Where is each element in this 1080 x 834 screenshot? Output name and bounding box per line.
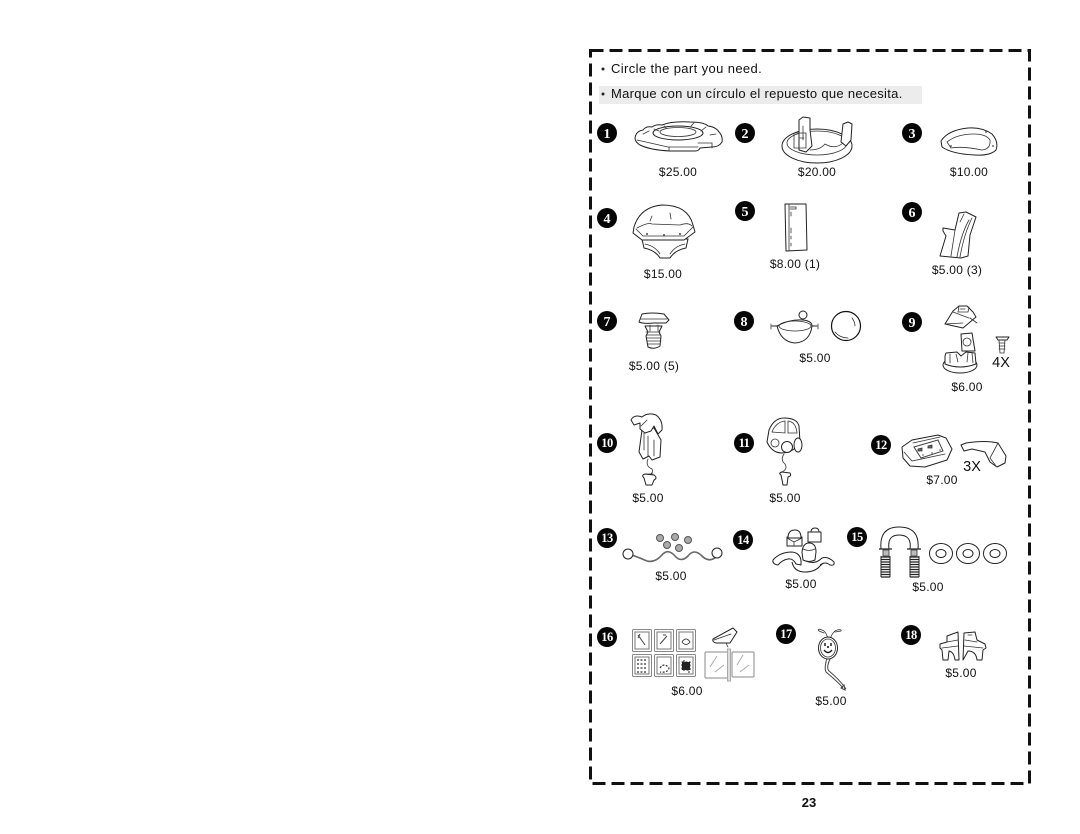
part 18 (901, 625, 986, 680)
part 2: 2 (742, 127, 748, 142)
part 11: $5.00 (769, 491, 801, 505)
page number: 23 (802, 795, 816, 810)
part 16: $6.00 (671, 684, 703, 698)
part 17: 17 (780, 627, 792, 641)
part 10: 10 (601, 436, 613, 450)
part 1 (597, 122, 722, 179)
part 4 (597, 205, 695, 281)
part 14: $5.00 (785, 577, 817, 591)
part 14: 14 (737, 533, 750, 547)
part 7 (597, 311, 679, 373)
instruction: Spanish highlighted: Marque con un círculo el repuesto que necesita. (611, 86, 903, 101)
part 12: 3X (963, 459, 981, 475)
part 13: $5.00 (655, 569, 687, 583)
part 7: 7 (604, 315, 610, 330)
part 18: $5.00 (945, 666, 977, 680)
part 10 (597, 414, 664, 505)
part 9: 9 (908, 316, 916, 331)
part 15: $5.00 (912, 580, 944, 594)
part 6: 6 (908, 206, 916, 221)
part 15 (847, 527, 1006, 594)
part 1: $25.00 (659, 165, 697, 179)
part 6: $5.00 (3) (932, 263, 982, 277)
part 7: $5.00 (5) (629, 359, 679, 373)
part 18: 18 (905, 628, 917, 642)
part 12 (871, 435, 1006, 487)
part 3: 3 (908, 127, 916, 142)
part 2 (735, 117, 852, 179)
instruction: English: Circle the part you need. (611, 61, 762, 76)
panel: dashed order border (590, 50, 1030, 784)
part 9: 4X (992, 355, 1010, 371)
part 1: 1 (604, 127, 610, 142)
part 8 (734, 311, 860, 365)
part 5: $8.00 (1) (770, 257, 820, 271)
part 3 (902, 123, 997, 179)
part 13: 13 (601, 531, 613, 545)
part 13 (597, 528, 722, 583)
part 2: $20.00 (798, 165, 836, 179)
part 5: 5 (742, 205, 748, 220)
part 12: $7.00 (926, 473, 958, 487)
part 4: 4 (604, 212, 610, 227)
part 16: 16 (601, 630, 613, 644)
part 10: $5.00 (632, 491, 664, 505)
part 17: $5.00 (815, 694, 847, 708)
part 16 (597, 627, 754, 698)
part 12: 12 (875, 438, 887, 452)
part 5 (735, 201, 820, 271)
part 8: $5.00 (799, 351, 831, 365)
part 11: 11 (739, 436, 750, 450)
part 9 (902, 306, 1010, 394)
part 14 (733, 528, 834, 591)
part 3: $10.00 (950, 165, 988, 179)
part 15: 15 (851, 530, 863, 544)
part 6 (902, 202, 982, 277)
part 9: $6.00 (951, 380, 983, 394)
part 4: $15.00 (644, 267, 682, 281)
part 8: 8 (740, 315, 748, 330)
part 11 (734, 418, 802, 505)
part 17 (776, 624, 847, 708)
